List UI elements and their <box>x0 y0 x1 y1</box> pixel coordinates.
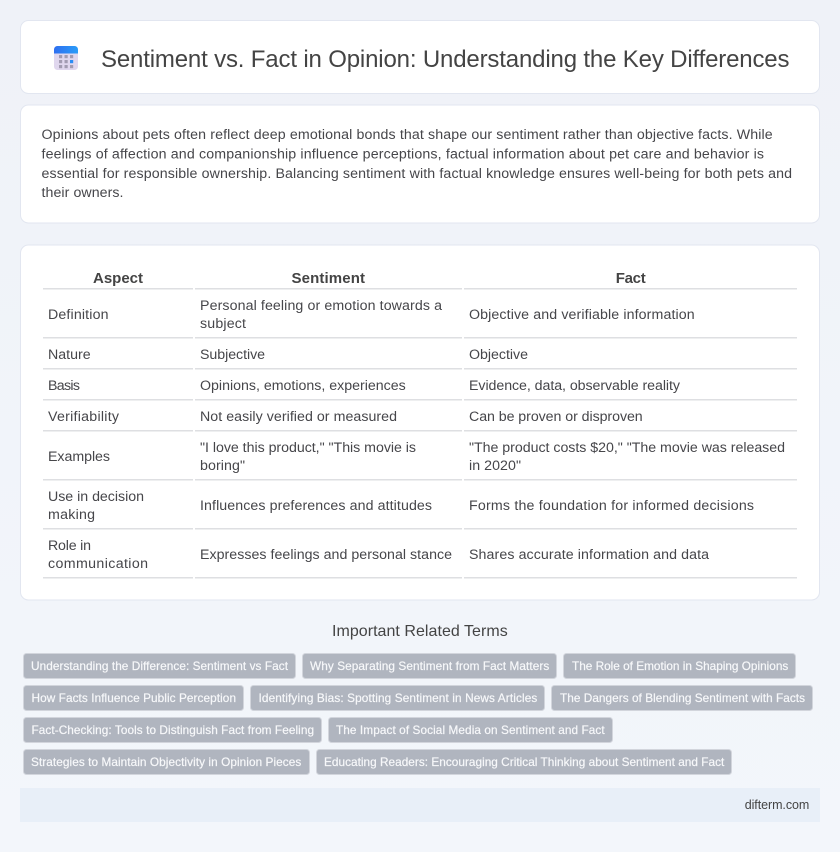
panel: header <box>20 20 820 94</box>
row: basis: Basis <box>48 378 80 394</box>
row: examples: boring" <box>200 458 245 474</box>
tag <box>250 686 544 710</box>
row: role in communication: Expresses feelings and personal stance <box>200 547 452 563</box>
row: definition: Definition <box>48 307 108 323</box>
tag: Understanding the Difference: Sentiment vs Fact <box>31 659 289 673</box>
panel: comparison table <box>20 245 820 600</box>
row: definition: Objective and verifiable information <box>469 307 695 323</box>
row: verifiability <box>48 409 643 425</box>
panel: introduction <box>20 105 820 223</box>
panel: related terms tags <box>24 654 812 774</box>
heading: important related terms: Important Related Terms <box>332 623 508 640</box>
panel: footer <box>20 788 820 822</box>
tag <box>552 686 812 710</box>
row: verifiability: Not easily verified or measured <box>200 409 397 425</box>
row: use in decision making <box>48 489 754 523</box>
tag <box>316 750 732 774</box>
tag: Why Separating Sentiment from Fact Matters <box>310 659 549 673</box>
tag <box>24 654 296 678</box>
row: use in decision making: Use in decision <box>48 489 144 505</box>
row: nature: Objective <box>469 347 528 363</box>
table header <box>93 270 646 287</box>
row: examples: Examples <box>48 449 110 465</box>
tag <box>24 750 310 774</box>
row: nature: Nature <box>48 347 91 363</box>
table header: Aspect <box>93 270 143 287</box>
footer source text: difterm.com <box>745 798 809 812</box>
row: role in communication: Shares accurate information and data <box>469 547 709 563</box>
row: definition: subject <box>200 316 246 332</box>
row: verifiability: Verifiability <box>48 409 120 425</box>
row: nature: Subjective <box>200 347 265 363</box>
row: use in decision making: Forms the foundation for informed decisions <box>469 498 754 514</box>
table header: Fact <box>616 270 646 287</box>
row: examples: "The product costs $20," "The movie was released <box>469 440 785 456</box>
row: basis <box>48 378 681 394</box>
tag: Fact-Checking: Tools to Distinguish Fact from Feeling <box>32 723 314 737</box>
row: definition <box>48 298 695 332</box>
text block: introduction paragraph: their owners. <box>42 185 124 201</box>
icon: calendar <box>54 46 78 70</box>
table header: Sentiment <box>292 270 365 287</box>
tag <box>24 718 322 742</box>
row: examples: "I love this product," "This movie is <box>200 440 416 456</box>
text block: introduction paragraph: Opinions about pets often reflect deep emotional bonds that shape our sentiment rather than objective facts. While <box>42 127 773 143</box>
row: use in decision making: making <box>48 507 95 523</box>
row: definition: Personal feeling or emotion towards a <box>200 298 442 314</box>
tag: The Impact of Social Media on Sentiment and Fact <box>336 723 605 737</box>
tag <box>564 654 796 678</box>
tag: Strategies to Maintain Objectivity in Opinion Pieces <box>31 755 301 769</box>
tag: Identifying Bias: Spotting Sentiment in News Articles <box>258 691 537 705</box>
tag: The Dangers of Blending Sentiment with Facts <box>560 691 805 705</box>
row: basis: Evidence, data, observable reality <box>469 378 681 394</box>
row: role in communication: communication <box>48 556 148 572</box>
tag <box>328 718 612 742</box>
tag: Educating Readers: Encouraging Critical Thinking about Sentiment and Fact <box>324 755 725 769</box>
tag <box>24 686 244 710</box>
row: nature <box>48 347 528 363</box>
tag <box>302 654 556 678</box>
row: role in communication: Role in <box>48 538 91 554</box>
row: basis: Opinions, emotions, experiences <box>200 378 406 394</box>
row: use in decision making: Influences preferences and attitudes <box>200 498 432 514</box>
row: verifiability: Can be proven or disproven <box>469 409 643 425</box>
row: examples: in 2020" <box>469 458 521 474</box>
row: role in communication <box>48 538 709 572</box>
text block: introduction paragraph <box>42 127 792 201</box>
row: examples <box>48 440 785 474</box>
tag: The Role of Emotion in Shaping Opinions <box>572 659 788 673</box>
tag: How Facts Influence Public Perception <box>32 691 236 705</box>
title: Sentiment vs. Fact in Opinion: Understanding the Key Differences <box>101 46 790 73</box>
text block: introduction paragraph: feelings of affection and companionship influence perceptions, factual information about pet care and behavior is <box>42 146 764 162</box>
text block: introduction paragraph: essential for responsible ownership. Balancing sentiment with factual knowledge ensures well-being for both pets and <box>42 166 792 182</box>
